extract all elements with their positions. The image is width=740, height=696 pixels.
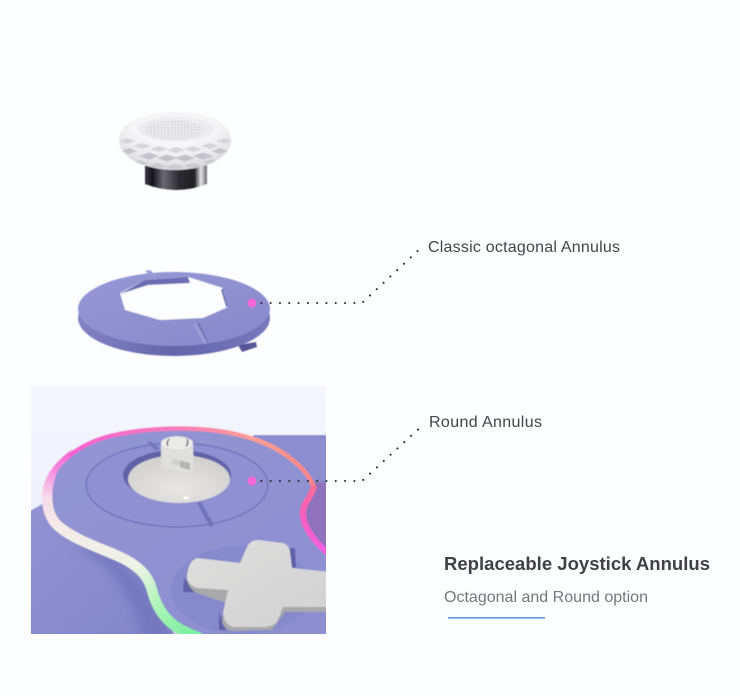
ring rear tab	[238, 342, 257, 352]
dome	[128, 455, 230, 503]
dish	[129, 112, 223, 142]
annulus circle	[86, 443, 268, 527]
marker dot	[248, 298, 256, 308]
text block: title and subtitle	[444, 553, 710, 619]
d-pad	[187, 540, 330, 627]
underline	[448, 617, 545, 619]
leader line	[252, 424, 424, 481]
d-pad recess	[172, 548, 245, 592]
rear controller body	[252, 434, 326, 483]
annulus ridges	[147, 441, 160, 450]
octagonal opening	[120, 277, 228, 320]
top plate	[46, 428, 330, 640]
panel: controller close-up	[30, 385, 330, 640]
ring ridges	[145, 270, 157, 277]
leader line	[252, 245, 424, 303]
d-pad side	[187, 580, 326, 632]
marker dot	[248, 476, 256, 486]
lower body	[30, 503, 176, 640]
panel background	[30, 385, 327, 635]
lower body shadow	[83, 548, 178, 634]
callout: classic octagonal annulus	[248, 239, 620, 308]
stick post	[161, 436, 194, 473]
label: Classic octagonal Annulus	[428, 239, 620, 256]
subtitle: Octagonal and Round option	[444, 589, 648, 606]
light strip	[42, 428, 330, 638]
icon: joystick cap	[119, 112, 232, 190]
callout: round annulus	[248, 414, 542, 486]
heading: Replaceable Joystick Annulus	[444, 553, 710, 574]
metal shaft	[145, 160, 207, 190]
icon: classic octagonal annulus	[78, 270, 270, 356]
socket	[122, 451, 232, 489]
label: Round Annulus	[429, 414, 542, 431]
